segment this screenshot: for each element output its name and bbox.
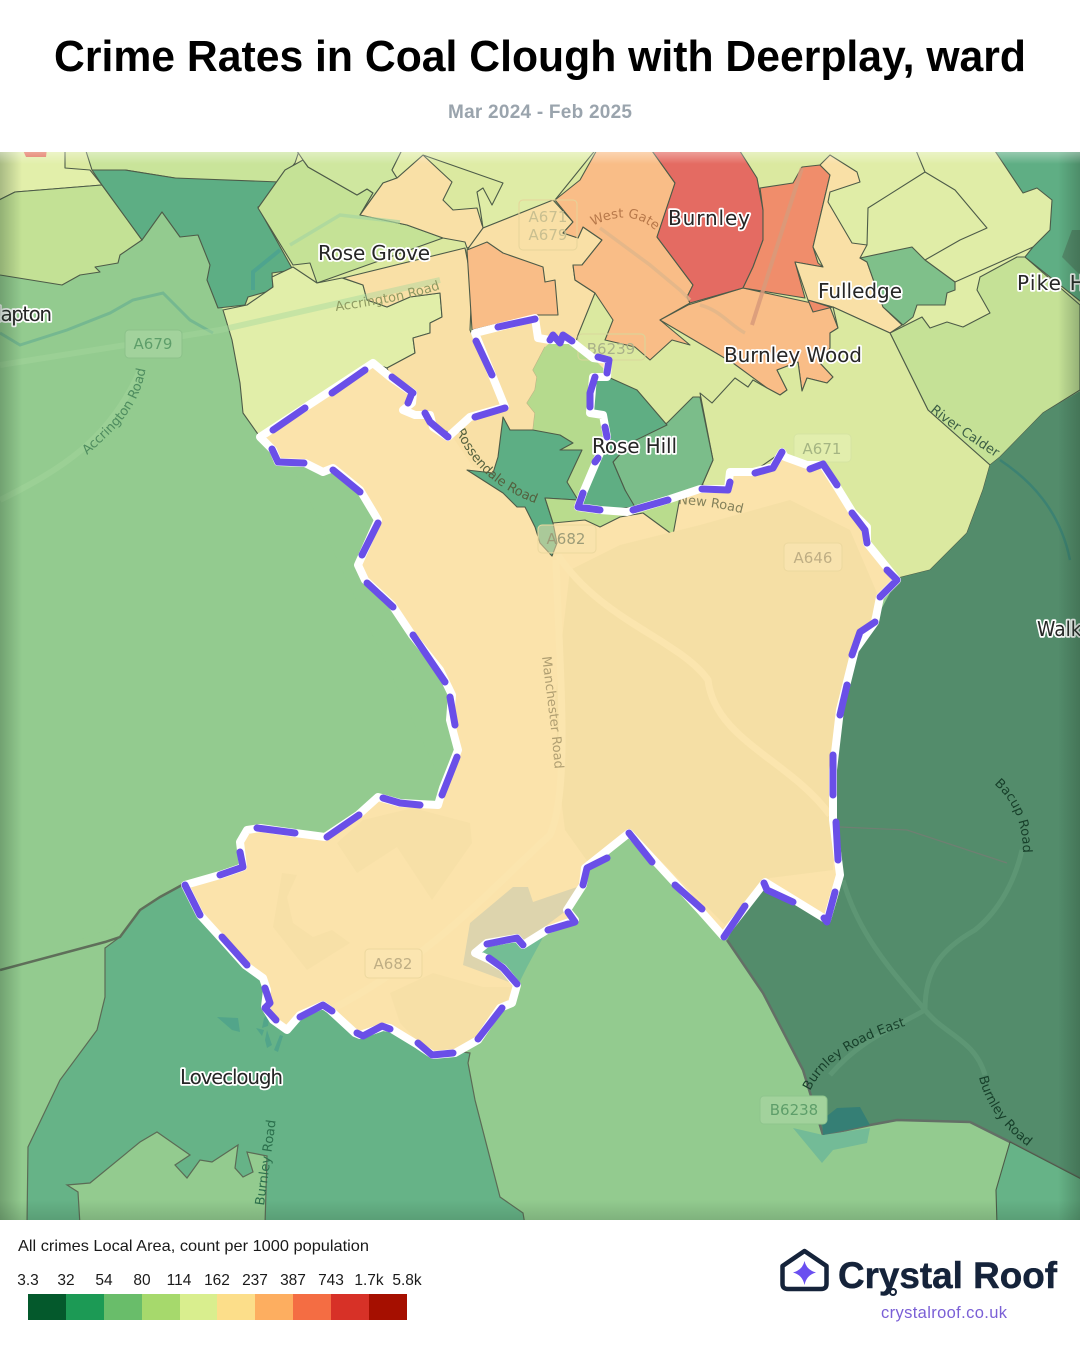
shield: A671 east: A671 [803,440,841,458]
area: small red-orange sliver [808,300,833,312]
label: Fulledge: Fulledge [818,279,902,303]
area: tan Rose Grove south [343,248,505,433]
map edge shading [0,152,1080,1220]
area: dark canal [253,250,280,290]
area: Loveclough green [27,885,525,1225]
ward: pale road lines [330,555,830,1010]
label: Rose Grove: Rose Grove [318,241,430,265]
subtitle: date range: Mar 2024 - Feb 2025 [448,102,632,123]
choropleth map [0,152,1080,1220]
area: western green valley [67,213,214,300]
area: NE district lines [867,148,1033,282]
area: dark green Habergham [92,170,293,308]
shield: B6238: B6238 [770,1101,818,1119]
area: northern strip [86,152,298,182]
ward fill [185,318,897,1055]
area: orange Burnley west [555,148,693,360]
ward: tan block edge [503,347,545,430]
ward boundary: white casing [185,318,897,1055]
area: top-right green [993,148,1080,305]
shield: A671 A679: A679 [529,226,567,244]
road label: Manchester Road: Manchester Road [542,656,564,768]
label: Rose Hill: Rose Hill [592,434,677,458]
area: big pale south-east [700,307,990,578]
shield: B6239: B6239 [587,340,635,358]
area: Rose Grove light green [258,160,443,283]
area: lower right green [996,1142,1080,1225]
area: Calder valley lane [752,168,802,325]
road label: Bacup Road: Bacup Road [995,778,1033,852]
icon: house with star [782,1251,826,1289]
area: moor boundary line [727,940,1080,1181]
shield: A682 south [365,949,422,978]
area: orange Burnley Wood [660,288,838,395]
road label: Rossendale Road: Rossendale Road [459,428,538,503]
area: reservoir light [793,1128,870,1163]
area: Rose Hill mid green [613,397,713,508]
label: Burnley: Burnley [668,206,750,230]
area: Hapton boundary line [0,885,182,970]
legend tick labels: 3.3 [17,1272,39,1289]
area: tan central north [467,200,602,345]
legend colour scale [28,1294,407,1320]
shield: B6238 [760,1096,827,1124]
legend title: All crimes Local Area, count per 1000 population [18,1238,369,1255]
road label: Accrington Road west: Accrington Road [84,368,146,455]
place labels [0,206,1080,1089]
area: green Fulledge block [860,247,955,325]
legend tick labels [17,1272,422,1289]
area: tan north [360,155,490,248]
legend tick labels: 387 [280,1272,306,1289]
logo wordmark: Crystal Roof [838,1255,1058,1296]
shield: A679 west: A679 [134,335,172,353]
area: top-right dark wedge [1062,230,1080,274]
ward boundary: purple dashes [185,319,897,1055]
ward: grey scrub patch [463,887,577,985]
ward: darker land patch east [555,500,880,925]
legend tick labels: 114 [167,1272,192,1289]
shield: A682 south: A682 [374,955,412,973]
shield: A646: A646 [794,549,832,567]
area: pale north [392,148,597,228]
ward: central tan block [450,318,550,473]
area: southern light strip [545,497,680,535]
legend tick labels: 162 [204,1272,230,1289]
area: reservoir dark [822,1107,870,1135]
road label: Accrington Road centre: Accrington Road [336,280,440,311]
area: Rose Grove canal [290,215,400,245]
shield: A671 east [794,434,851,462]
legend tick labels: 237 [242,1272,268,1289]
shield: A682 north: A682 [547,530,585,548]
legend tick labels: 743 [318,1272,344,1289]
road label: West Gate: West Gate [590,208,658,230]
area: red Burnley centre [650,148,763,303]
label: Burnley Wood: Burnley Wood [724,343,862,367]
label: Loveclough: Loveclough [180,1065,283,1089]
road labels [84,208,1033,1205]
road label: New Road: New Road [679,498,744,513]
area: west motorway [0,280,440,500]
shield: A646 [784,543,842,571]
ward: darker patches south-west [273,808,513,1057]
area: pale west of ward [223,267,442,437]
area: top-left pale [0,152,101,199]
shield: A679 west [125,330,182,358]
area: moor tracks [830,850,1022,1075]
road label: Burnley Road east: Burnley Road [979,1076,1033,1146]
area: tan Fulledge [795,155,902,333]
area: Loveclough ponds [217,1012,283,1052]
road label: Burnley Road west: Burnley Road [254,1120,276,1205]
area: red-orange east Burnley [743,165,830,298]
area: top small red [24,152,46,157]
title: Crime Rates in Coal Clough with Deerplay, ward [54,32,1026,81]
road shields [125,200,851,1124]
area: NE pale [828,148,1052,328]
area: river channel [1000,460,1070,560]
area: orange block [467,242,558,330]
legend tick labels: 32 [57,1272,75,1289]
legend tick labels: 80 [133,1272,151,1289]
ward: teal notch [480,930,547,987]
area: northern pale base [66,152,1080,466]
shield: A671 A679 [519,200,577,250]
area: north-west light green [0,185,142,285]
road label: Burnley Road East: Burnley Road East [802,1018,906,1090]
legend [17,1238,422,1320]
shield: A671 A679: A671 [529,208,567,226]
road label: River Calder: River Calder [931,404,1000,456]
area: western canal [0,293,213,345]
logo url: crystalroof.co.uk [881,1304,1008,1322]
area: top green band [297,152,400,214]
legend tick labels: 1.7k [354,1272,384,1289]
area: moor field line [840,827,1007,863]
area: dark green east moor [727,388,1080,1181]
area: Rosendale dark green [467,417,582,556]
legend tick labels: 5.8k [392,1272,422,1289]
area: Rose Hill dark green [578,377,667,510]
legend tick labels: 54 [95,1272,113,1289]
logo: Crystal Roof [782,1251,1058,1322]
area: West Gate road [600,228,745,333]
shield: B6239 [578,334,645,360]
shield: A682 north [538,525,596,553]
logo key on the y descender [890,1289,896,1295]
area: east light green [890,257,1080,465]
area: central light green [527,341,608,500]
